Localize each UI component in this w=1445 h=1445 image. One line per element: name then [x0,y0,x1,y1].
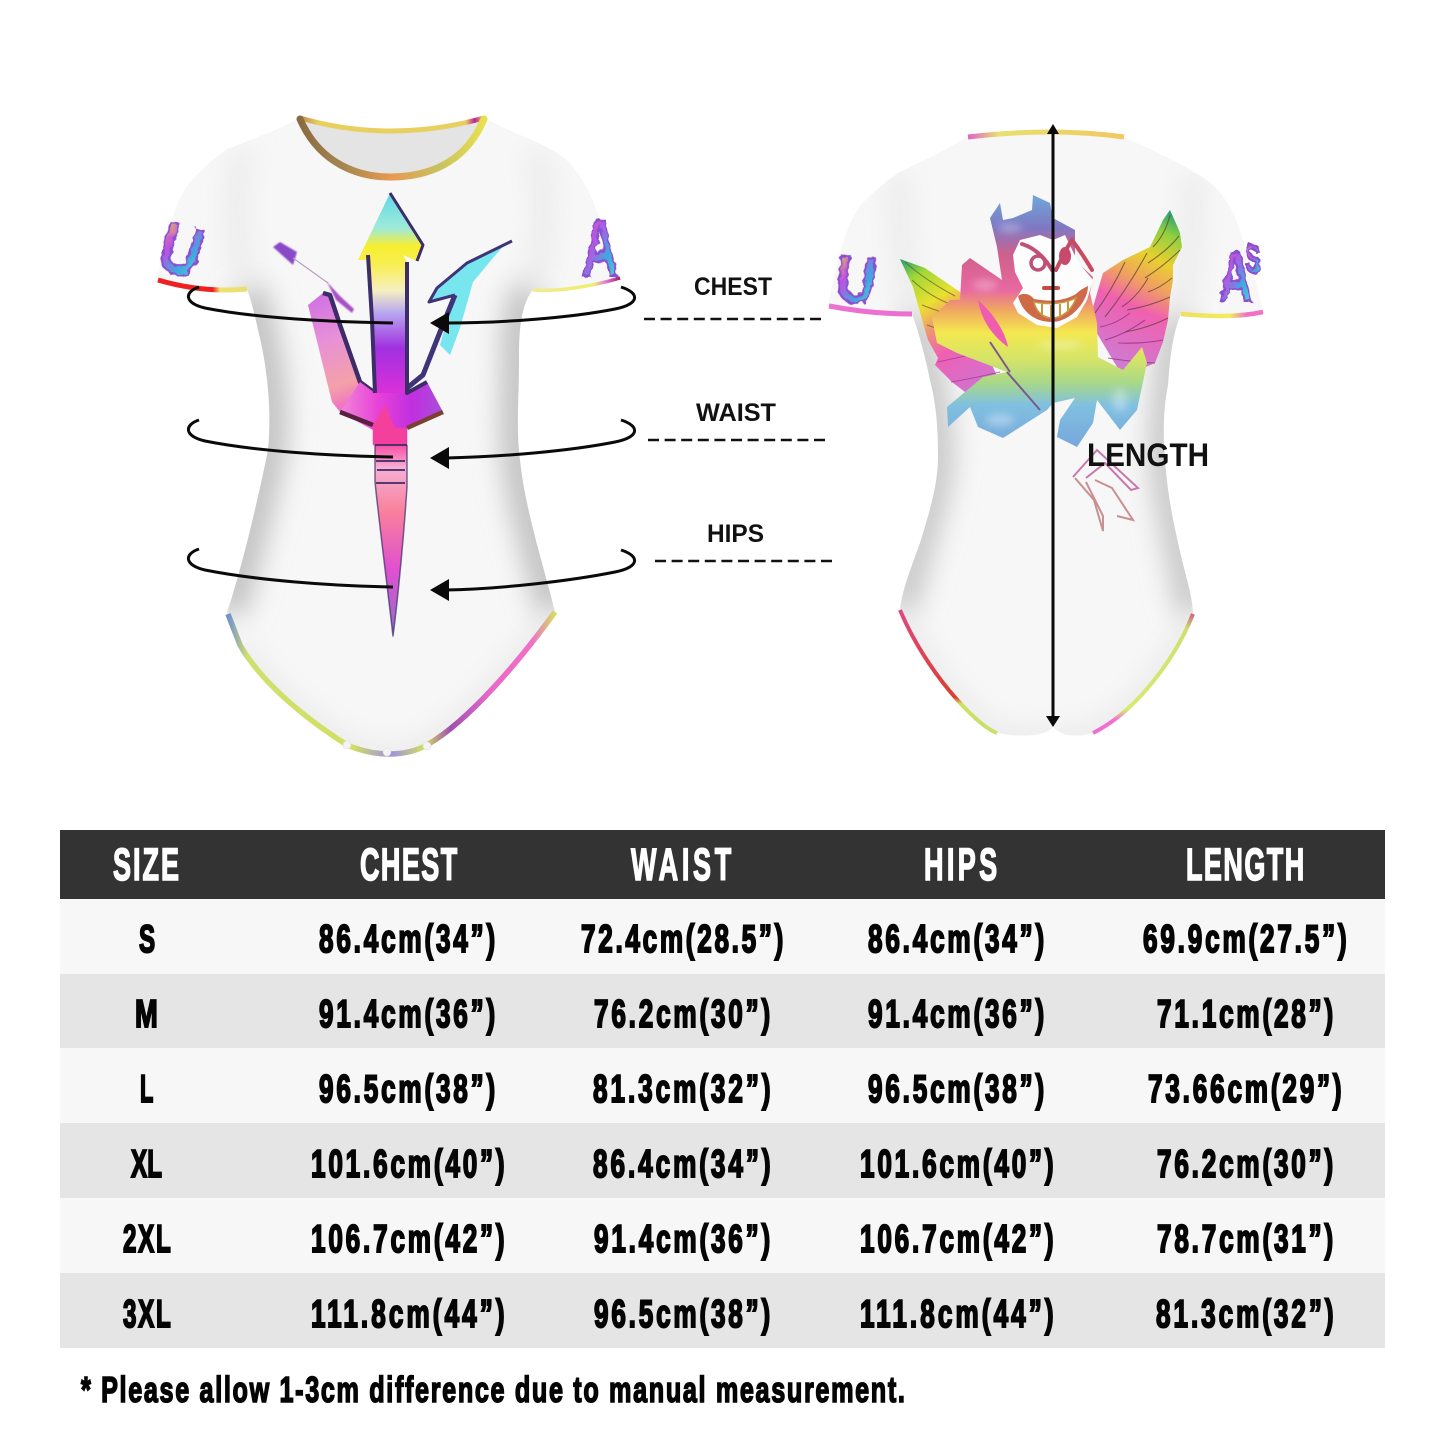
back left leg hem [900,610,997,733]
sleeve letters AS: A [1219,238,1252,316]
front body shape [157,117,620,754]
row M: 71.1cm(28”) [1157,993,1333,1036]
row M: 76.2cm(30”) [594,993,770,1036]
panel: front view garment [150,117,620,756]
footnote: * Please allow 1-3cm difference due to manual measurement. [81,1370,905,1410]
waist measure arrows [188,420,635,469]
left prong [308,293,375,430]
row M [60,974,1385,1048]
table header row: SIZE [113,839,179,890]
table header row [60,830,1385,899]
row M: 91.4cm(36”) [868,993,1044,1036]
trident logo [273,193,512,636]
row 2XL: 78.7cm(31”) [1157,1218,1333,1261]
collar back band [300,118,484,131]
neck opening [300,117,484,178]
row S: 69.9cm(27.5”) [1143,918,1347,961]
pitchfork shaft [990,342,1040,410]
row S: 86.4cm(34”) [868,918,1044,961]
eyes and brows [1022,240,1092,288]
chest measure arrows [188,287,635,334]
row XL: 101.6cm(40”) [860,1143,1054,1186]
row XL [60,1123,1385,1198]
row 2XL: 91.4cm(36”) [594,1218,770,1261]
leg hem [228,612,555,754]
panel: back view garment [828,132,1263,737]
row 3XL: 111.8cm(44”) [311,1293,505,1336]
snap buttons [343,741,431,756]
back body shading [895,291,1198,636]
row 2XL [60,1198,1385,1273]
row S: S [139,917,155,960]
row L: 73.66cm(29”) [1148,1068,1342,1111]
devil mascot with wings [900,195,1182,531]
length measure arrow [1046,124,1060,727]
tail with pitchfork [1073,450,1138,531]
front body shading [227,262,555,635]
row XL: XL [131,1142,162,1185]
sleeve letter A: A [582,203,618,294]
sleeve letter U: U [833,240,879,318]
right prong dark edges [407,241,512,388]
table header row: CHEST [360,839,457,890]
label: hips: HIPS [707,520,764,548]
row L: 81.3cm(32”) [593,1068,771,1111]
row XL: 76.2cm(30”) [1157,1143,1333,1186]
row L: 96.5cm(38”) [319,1068,495,1111]
left prong tip [273,242,354,313]
back left sleeve hem [829,306,912,314]
collar front band [300,119,484,177]
row 3XL: 96.5cm(38”) [594,1293,770,1336]
row 2XL: 2XL [123,1217,171,1260]
label: waist: WAIST [696,399,776,427]
tie-dye body [932,195,1147,447]
back collar [968,132,1124,137]
row XL: 86.4cm(34”) [593,1143,771,1186]
row L [60,1048,1385,1123]
crossbar [340,382,443,445]
grin with teeth [1018,286,1088,322]
row XL: 101.6cm(40”) [311,1143,505,1186]
row M: 91.4cm(36”) [319,993,495,1036]
back body shape [828,132,1263,736]
sleeve letters AS: S [1246,239,1261,281]
right sleeve hem [533,278,620,290]
row 3XL [60,1273,1385,1348]
row L: L [140,1066,153,1111]
sleeve letter U: U [150,207,212,294]
right prong cyan [432,242,507,355]
row S: 86.4cm(34”) [319,918,495,961]
center shaft and arrowhead [358,193,423,636]
row 2XL: 106.7cm(42”) [860,1218,1054,1261]
left wing [900,259,1003,403]
body mottling [973,224,1128,426]
size table [60,830,1385,1348]
row 3XL: 81.3cm(32”) [1156,1293,1334,1336]
overlaid pink feathers [978,300,1008,347]
hips measure arrows [188,549,635,601]
back right sleeve hem [1181,312,1263,316]
row 3XL: 3XL [123,1292,171,1335]
shaft dark edges [340,193,443,636]
white face [1013,235,1093,328]
label: length: LENGTH [1087,437,1209,473]
crossbar center pink [373,405,407,445]
row M: M [135,993,158,1036]
back right leg hem [1093,614,1193,733]
row 3XL: 111.8cm(44”) [860,1293,1054,1336]
label: chest: CHEST [694,273,772,301]
table header row: WAIST [631,839,731,890]
table header row: HIPS [924,839,997,890]
table header row: LENGTH [1186,839,1304,890]
row 2XL: 106.7cm(42”) [311,1218,505,1261]
row S [60,899,1385,974]
row S: 72.4cm(28.5”) [581,918,783,961]
row L: 96.5cm(38”) [868,1068,1044,1111]
left sleeve hem [158,280,247,290]
right wing [1093,210,1182,377]
